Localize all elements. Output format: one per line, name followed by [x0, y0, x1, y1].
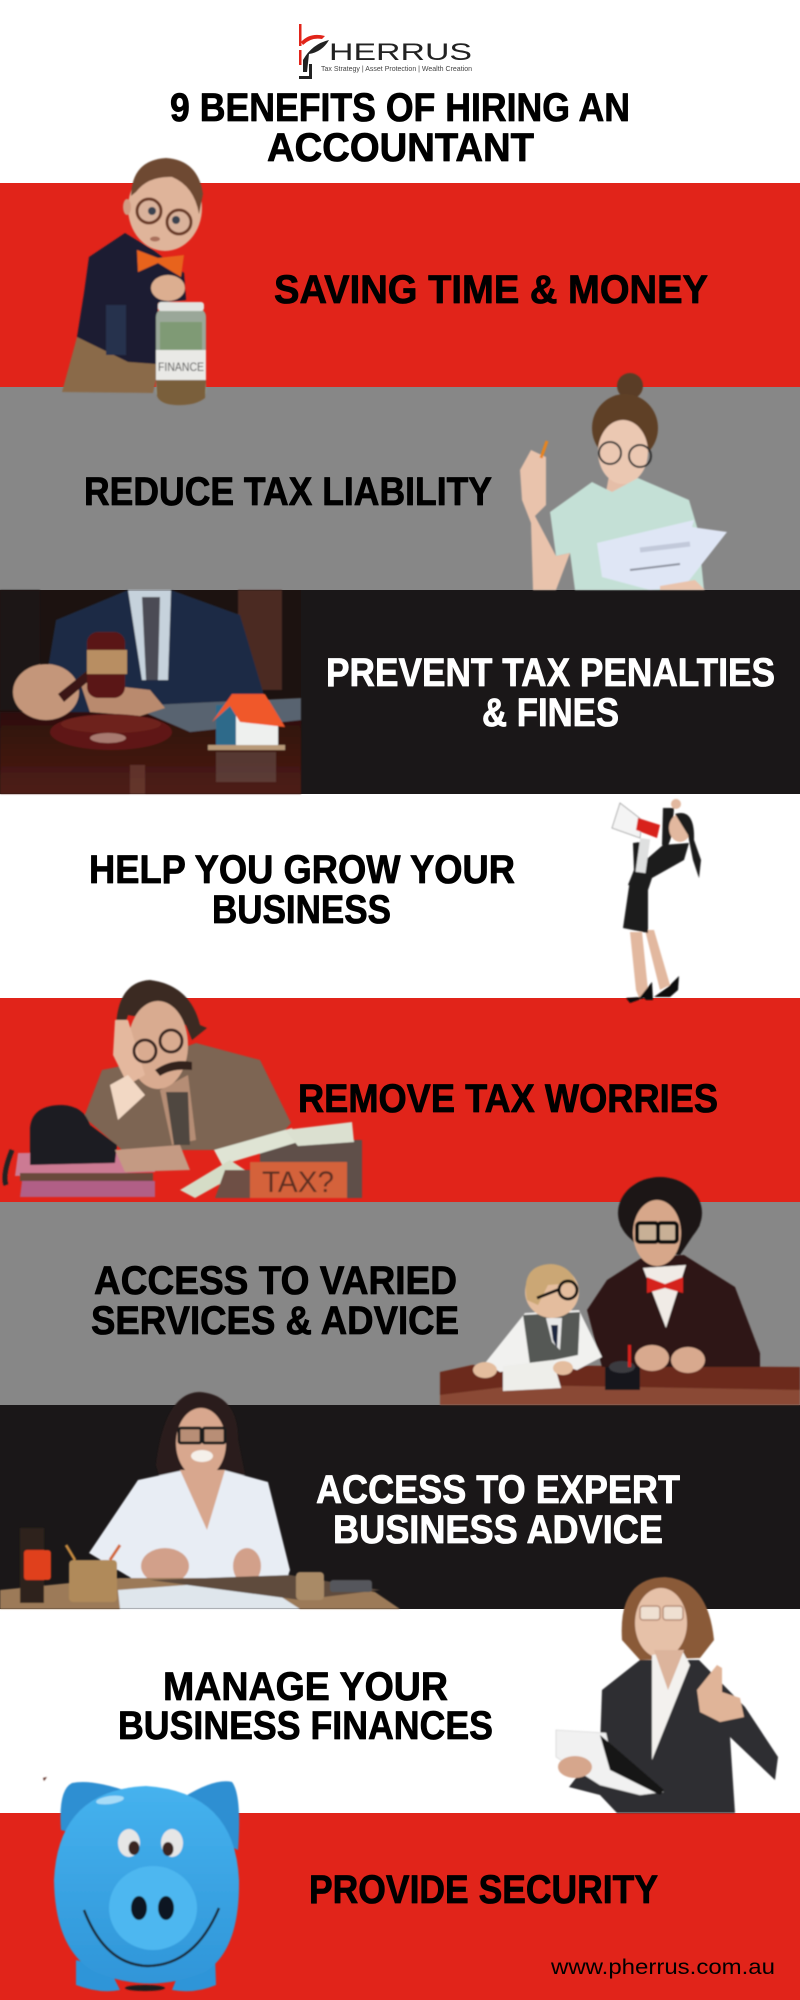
icon: Pherrus P mark — [299, 24, 329, 79]
heading: manage your business finances — [118, 1665, 493, 1748]
panel: reduce tax liability band — [0, 387, 800, 590]
panel: saving time and money band — [0, 183, 800, 387]
tagline: Tax Strategy | Asset Protection | Wealth Creation — [321, 64, 472, 73]
heading: access to varied services and advice — [91, 1259, 459, 1343]
heading: access to expert business advice: ACCESS TO EXPERT — [316, 1468, 680, 1512]
wordmark: HERRUS — [329, 39, 472, 66]
panel: provide security band — [0, 1813, 800, 2000]
heading: remove tax worries: REMOVE TAX WORRIES — [298, 1077, 718, 1121]
illustration: woman with megaphone — [612, 799, 701, 1003]
heading: saving time and money: SAVING TIME & MONEY — [274, 268, 708, 312]
illustration: businesswoman giving thumbs up — [556, 1577, 778, 1813]
heading: reduce tax liability: REDUCE TAX LIABILITY — [84, 470, 492, 514]
title: 9 BENEFITS OF HIRING AN — [170, 86, 630, 130]
panel: manage finances band — [0, 1609, 800, 1813]
heading: access to expert business advice — [316, 1468, 680, 1552]
heading: access to expert business advice: BUSINESS ADVICE — [333, 1508, 663, 1552]
illustration: smiling woman at desk — [0, 1392, 400, 1609]
heading: manage your business finances: MANAGE YOUR — [163, 1665, 448, 1709]
panel: prevent tax penalties band — [0, 590, 800, 794]
heading: manage your business finances: BUSINESS FINANCES — [118, 1704, 493, 1748]
illustration: tired man with tax paperwork: TAX? — [262, 1166, 334, 1199]
website url: www.pherrus.com.au — [550, 1956, 775, 1979]
panel: remove tax worries band — [0, 998, 800, 1202]
panel: grow your business band — [0, 794, 800, 998]
illustration: blue piggy bank — [43, 1777, 239, 1991]
illustration: man and boy at desk — [440, 1177, 800, 1405]
heading: help you grow your business: HELP YOU GROW YOUR — [89, 848, 515, 892]
illustration: baby with glasses and finance jar — [62, 158, 206, 405]
heading: provide security: PROVIDE SECURITY — [309, 1868, 658, 1912]
heading: help you grow your business — [89, 848, 515, 932]
title — [170, 86, 630, 170]
panel: expert business advice band — [0, 1405, 800, 1609]
heading: access to varied services and advice: ACCESS TO VARIED — [94, 1259, 457, 1303]
illustration: baby with glasses and finance jar: FINANCE — [158, 360, 204, 374]
heading: help you grow your business: BUSINESS — [212, 888, 391, 932]
panel: varied services band — [0, 1202, 800, 1405]
photo: gavel and model house — [0, 590, 301, 794]
illustration: woman reading papers — [520, 373, 727, 590]
logo: Pherrus — [299, 24, 472, 79]
heading: prevent tax penalties and fines — [326, 651, 775, 735]
heading: prevent tax penalties and fines: & FINES — [482, 691, 619, 735]
illustration: tired man with tax paperwork — [5, 980, 362, 1199]
title: ACCOUNTANT — [267, 126, 534, 170]
heading: access to varied services and advice: SERVICES & ADVICE — [91, 1299, 459, 1343]
